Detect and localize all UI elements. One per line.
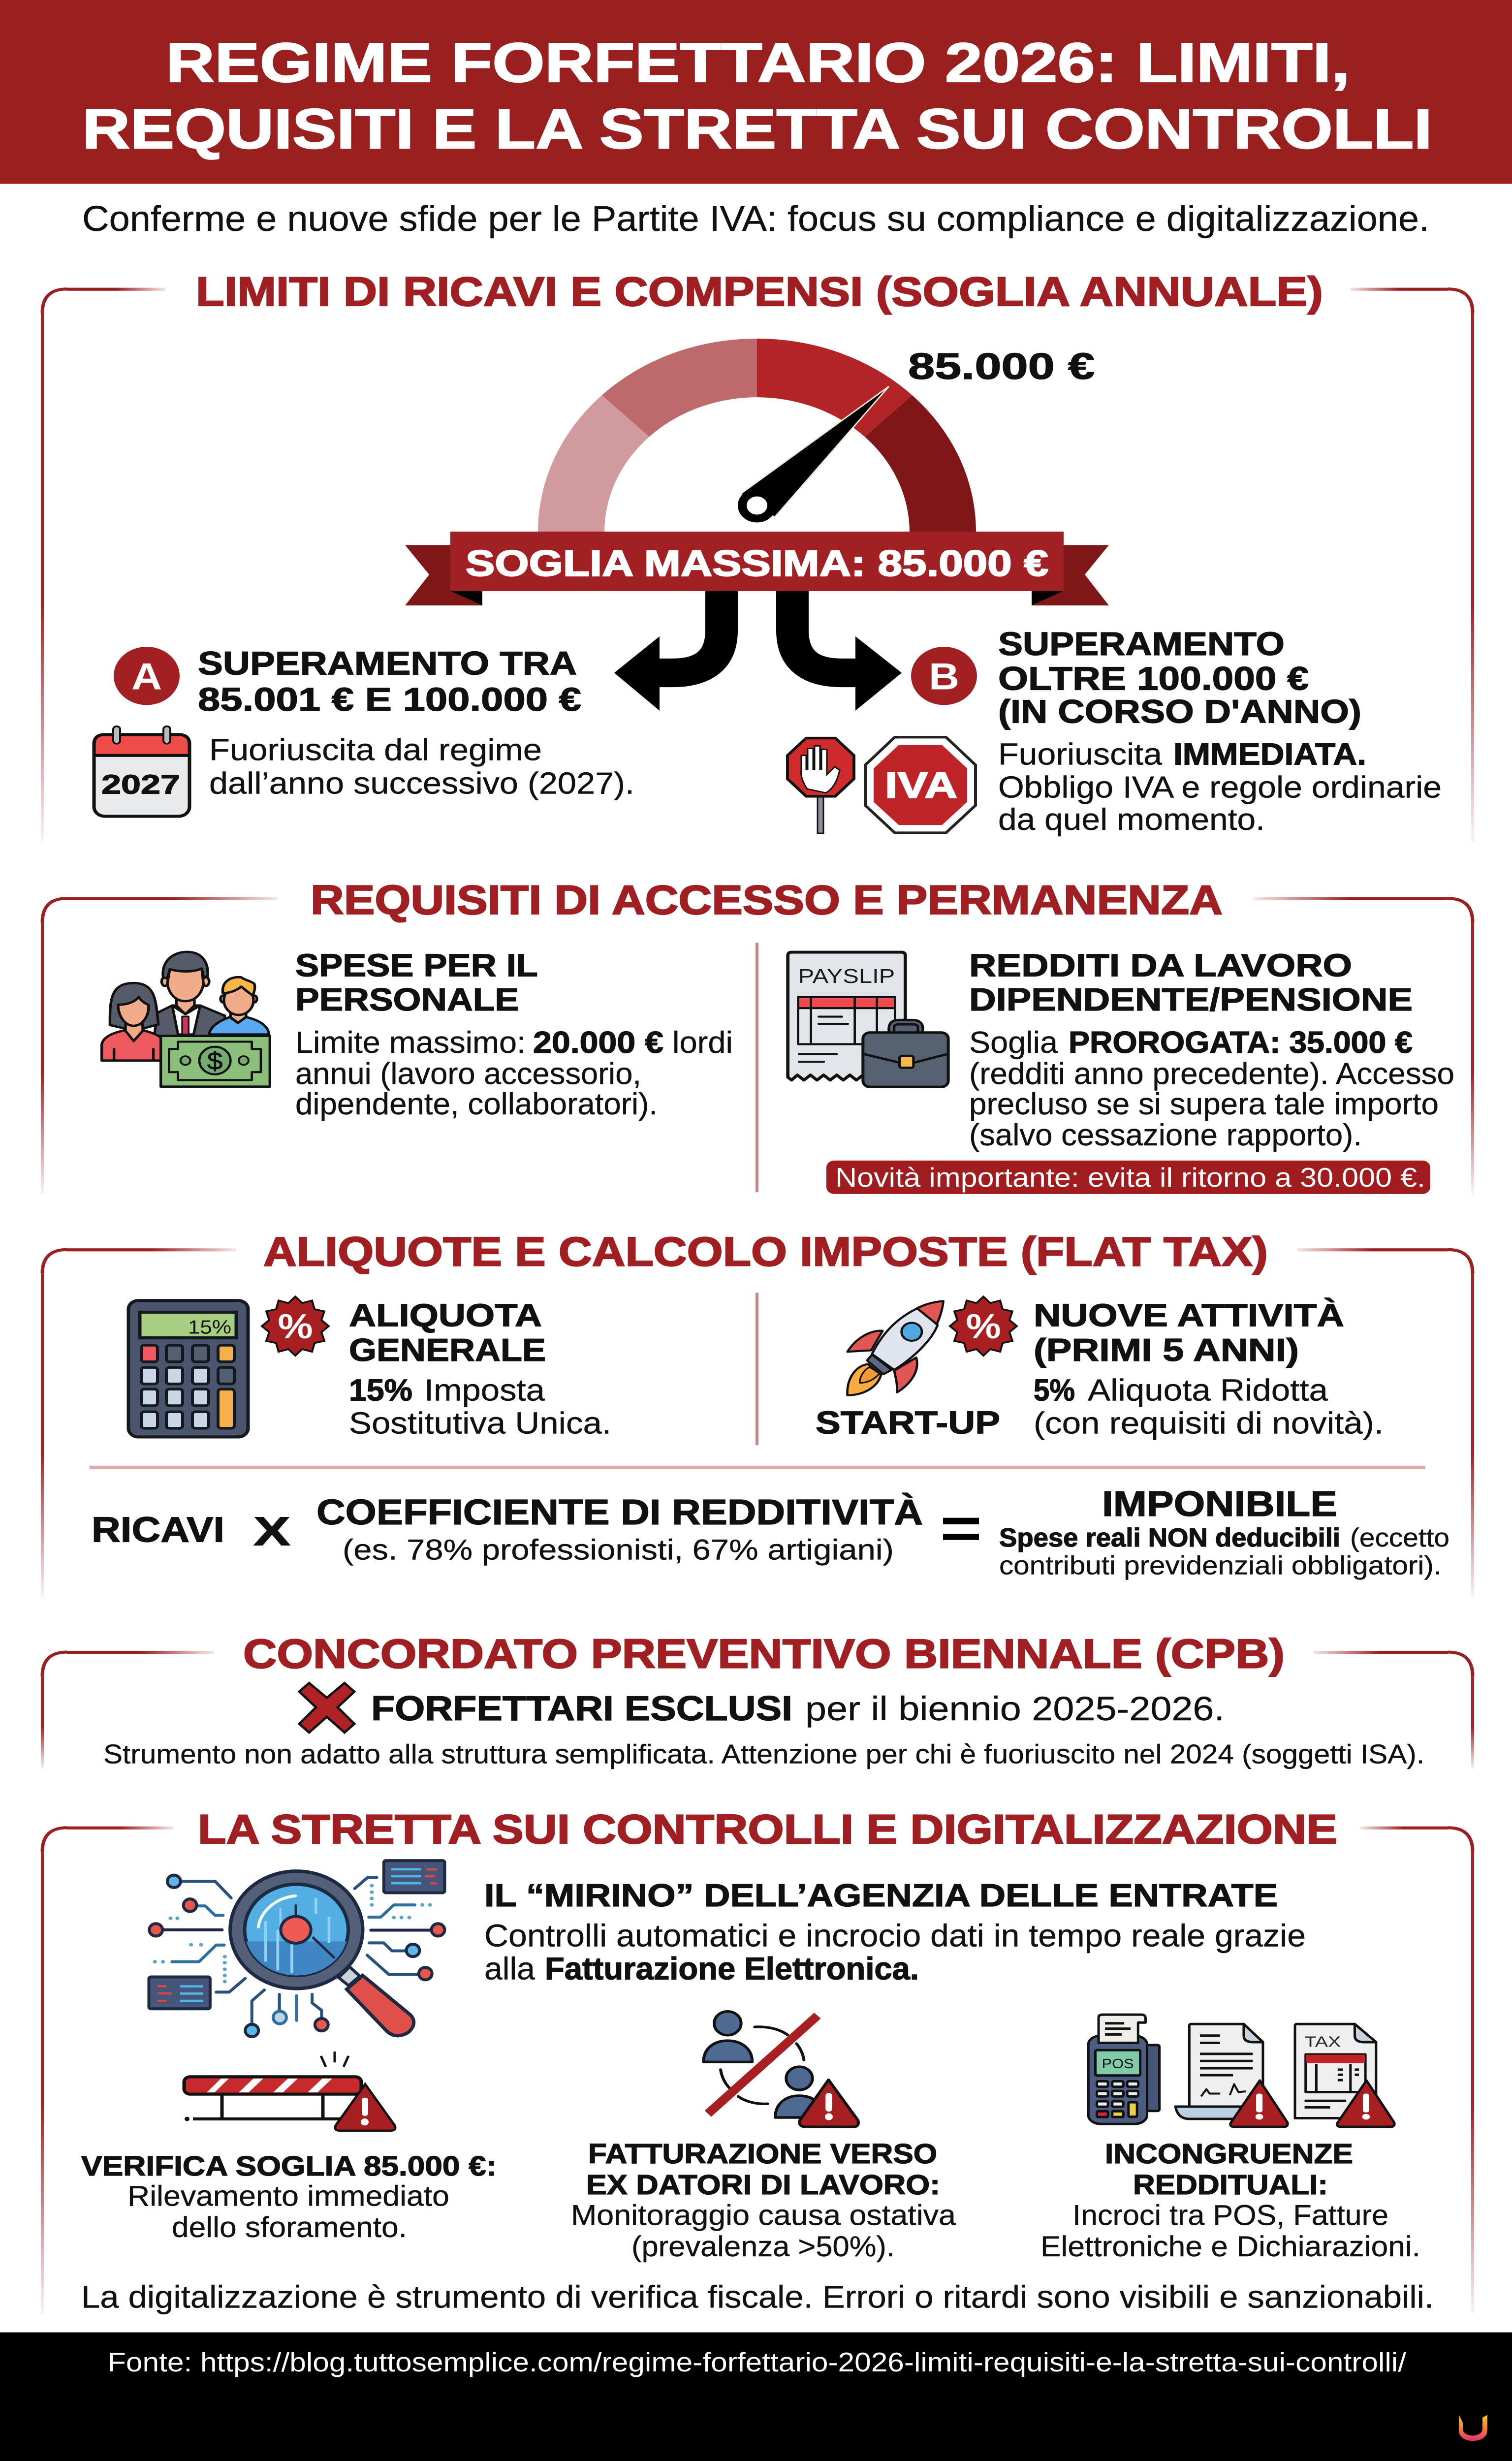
item: incongruenze: Elettroniche e Dichiarazioni.	[1040, 2231, 1420, 2263]
title: REQUISITI E LA STRETTA SUI CONTROLLI	[82, 97, 1432, 160]
option A	[94, 645, 634, 816]
text: A	[209, 732, 634, 800]
formula: IMPONIBILE	[1102, 1484, 1337, 1524]
icon: payslip and briefcase: PAYSLIP	[798, 965, 895, 988]
heading: redditi: REDDITI DA LAVORO	[969, 947, 1352, 983]
icon: A badge: A	[131, 656, 162, 697]
text: nuove attività: (con requisiti di novità).	[1034, 1406, 1384, 1440]
icon: B badge: B	[929, 656, 959, 697]
text: mirino: Fatturazione Elettronica.	[545, 1952, 919, 1987]
header banner	[0, 0, 1512, 184]
heading: nuove attività: (PRIMI 5 ANNI)	[1034, 1332, 1299, 1368]
formula: (es. 78% professionisti, 67% artigiani)	[343, 1534, 894, 1566]
icon: POS and documents: TAX	[1305, 2034, 1341, 2051]
heading: B: (IN CORSO D'ANNO)	[998, 694, 1361, 730]
text: redditi	[969, 1025, 1454, 1152]
heading: controlli: LA STRETTA SUI CONTROLLI E DIGITALIZZAZIONE	[198, 1806, 1337, 1852]
heading: nuove attività: NUOVE ATTIVITÀ	[1034, 1297, 1344, 1333]
text: spese: Limite massimo:	[295, 1025, 526, 1059]
item: verifica soglia	[81, 2150, 497, 2243]
item: incongruenze: Incroci tra POS, Fatture	[1072, 2200, 1388, 2232]
icon: payslip and briefcase	[788, 952, 948, 1087]
label: start-up: START-UP	[816, 1404, 1000, 1440]
text: mirino	[484, 1919, 1306, 1987]
icon: IVA stop sign: IVA	[885, 764, 957, 805]
gauge value: 85.000 €	[908, 346, 1095, 387]
panel: controlli	[41, 1806, 1474, 2314]
formula: X	[253, 1508, 290, 1554]
heading: redditi	[969, 947, 1413, 1017]
heading: A: 85.001 € E 100.000 €	[198, 681, 581, 718]
item: fatturazione: Monitoraggio causa ostativa	[571, 2200, 956, 2232]
panel: requisiti	[41, 877, 1474, 1195]
text: esclusi	[371, 1689, 1225, 1728]
heading: spese: SPESE PER IL	[295, 947, 538, 983]
icon: ex employer	[703, 2012, 858, 2127]
icon: people and money	[102, 952, 270, 1087]
icon: percent badge 2	[950, 1296, 1017, 1356]
text: spese: 20.000 €	[533, 1025, 663, 1059]
text: redditi: PROROGATA: 35.000 €	[1069, 1025, 1413, 1059]
text: mirino: Controlli automatici e incrocio dati in tempo reale grazie	[484, 1919, 1306, 1953]
text: aliquota generale: Sostitutiva Unica.	[349, 1406, 611, 1440]
formula: Spese reali NON deducibili	[999, 1523, 1340, 1552]
item: fatturazione: (prevalenza >50%).	[631, 2231, 895, 2263]
option B	[788, 626, 1442, 836]
text: B: Fuoriuscita	[998, 737, 1162, 771]
icon: calculator: 15%	[188, 1316, 231, 1338]
subtitle: Conferme e nuove sfide per le Partite IVA: focus su compliance e digitalizzazione.	[82, 199, 1429, 239]
panel: concordato	[41, 1631, 1474, 1769]
text: spese: dipendente, collaboratori).	[295, 1087, 658, 1121]
ribbon	[405, 532, 1109, 605]
item: fatturazione: FATTURAZIONE VERSO	[588, 2138, 937, 2169]
icon: rocket	[848, 1301, 944, 1395]
heading: mirino: IL “MIRINO” DELL’AGENZIA DELLE ENTRATE	[484, 1877, 1278, 1913]
formula: contributi previdenziali obbligatori).	[999, 1551, 1442, 1580]
formula: COEFFICIENTE DI REDDITIVITÀ	[316, 1492, 923, 1532]
text: B: Obbligo IVA e regole ordinarie	[998, 770, 1442, 804]
callout: novità: Novità importante: evita il ritorno a 30.000 €.	[835, 1163, 1425, 1193]
text: redditi: (salvo cessazione rapporto).	[969, 1118, 1362, 1152]
heading: B: SUPERAMENTO	[998, 626, 1285, 663]
heading: aliquota generale: GENERALE	[349, 1332, 546, 1368]
icon: percent badge 2: %	[966, 1307, 1001, 1346]
heading: spese	[295, 947, 538, 1017]
text: nuove attività: 5%	[1034, 1373, 1075, 1407]
text: spese: lordi	[672, 1025, 733, 1059]
heading: spese: PERSONALE	[295, 981, 519, 1017]
heading: concordato: CONCORDATO PREVENTIVO BIENNALE (CPB)	[243, 1631, 1285, 1676]
text: redditi: Soglia	[969, 1025, 1058, 1059]
icon: percent badge: %	[278, 1307, 313, 1346]
text: nuove attività	[1034, 1373, 1384, 1440]
heading: A: SUPERAMENTO TRA	[198, 645, 577, 682]
icon: red x	[299, 1683, 354, 1733]
icon: stop hand	[788, 738, 854, 833]
source: Fonte: https://blog.tuttosemplice.com/regime-forfettario-2026-limiti-requisiti-e-la-stretta-sui-controlli/	[108, 2347, 1407, 2377]
text: B: da quel momento.	[998, 802, 1265, 836]
arrows	[614, 587, 902, 711]
heading: aliquote: ALIQUOTE E CALCOLO IMPOSTE (FLAT TAX)	[263, 1229, 1268, 1274]
icon: calendar 2027	[94, 726, 189, 816]
heading: A	[198, 645, 581, 718]
text: redditi: precluso se si supera tale importo	[969, 1087, 1439, 1121]
icon: A badge	[114, 647, 180, 705]
text: aliquota generale	[349, 1373, 611, 1440]
text: conclusione: La digitalizzazione è strumento di verifica fiscale. Errori o ritardi sono visibili e sanzionabili.	[81, 2280, 1434, 2314]
item: verifica soglia: VERIFICA SOGLIA 85.000 €:	[81, 2150, 497, 2181]
item: verifica soglia: Rilevamento immediato	[127, 2180, 449, 2212]
item: verifica soglia: dello sforamento.	[172, 2212, 407, 2243]
icon: percent badge	[262, 1296, 329, 1356]
text: B	[998, 737, 1442, 836]
formula: (eccetto	[1350, 1523, 1449, 1552]
item: fatturazione: EX DATORI DI LAVORO:	[586, 2169, 940, 2200]
footer	[0, 2333, 1512, 2461]
heading: requisiti: REQUISITI DI ACCESSO E PERMANENZA	[311, 877, 1223, 923]
gauge	[538, 339, 976, 532]
icon: barrier	[184, 2051, 395, 2131]
heading: B: OLTRE 100.000 €	[998, 661, 1309, 697]
icon: calculator	[128, 1300, 248, 1437]
text: spese	[295, 1025, 733, 1121]
icon: people and money: $	[207, 1047, 222, 1075]
icon: logo	[1459, 2415, 1487, 2441]
text: A: Fuoriuscita dal regime	[209, 732, 542, 767]
icon: POS and documents	[1088, 2015, 1394, 2127]
icon: calendar 2027: 2027	[101, 770, 180, 800]
panel: limiti di ricavi	[41, 268, 1474, 842]
heading: B	[998, 626, 1361, 730]
text: esclusi: FORFETTARI ESCLUSI	[371, 1689, 792, 1728]
text: B: IMMEDIATA.	[1173, 737, 1366, 771]
title	[82, 32, 1432, 160]
icon: magnifier circuit	[149, 1861, 444, 2037]
text: A: dall’anno successivo (2027).	[209, 766, 634, 800]
item: incongruenze	[1040, 2138, 1420, 2263]
text: redditi: (redditi anno precedente). Accesso	[969, 1056, 1454, 1091]
formula: RICAVI	[92, 1510, 224, 1549]
text: spese: annui (lavoro accessorio,	[295, 1056, 641, 1091]
heading: aliquota generale: ALIQUOTA	[349, 1297, 542, 1333]
icon: IVA stop sign	[865, 737, 976, 833]
formula	[92, 1484, 1449, 1580]
heading: limiti: LIMITI DI RICAVI E COMPENSI (SOGLIA ANNUALE)	[196, 268, 1323, 315]
text: esclusi: per il biennio 2025-2026.	[805, 1690, 1225, 1728]
item: incongruenze: REDDITUALI:	[1133, 2169, 1328, 2200]
icon: B badge	[911, 647, 977, 705]
item: incongruenze: INCONGRUENZE	[1105, 2138, 1353, 2169]
heading: redditi: DIPENDENTE/PENSIONE	[969, 981, 1413, 1017]
text: aliquota generale: Imposta	[424, 1373, 545, 1407]
icon: POS and documents: POS	[1102, 2056, 1134, 2071]
ribbon: SOGLIA MASSIMA: 85.000 €	[466, 543, 1048, 584]
panel: aliquote	[41, 1229, 1474, 1598]
text: aliquota generale: 15%	[349, 1373, 412, 1407]
text: mirino: alla	[484, 1952, 535, 1987]
item: fatturazione	[571, 2138, 956, 2263]
text: nuove attività: Aliquota Ridotta	[1088, 1373, 1328, 1407]
heading: aliquota generale	[349, 1297, 546, 1368]
text: strumento: Strumento non adatto alla struttura semplificata. Attenzione per chi è fuoriuscito nel 2024 (soggetti ISA).	[103, 1739, 1424, 1769]
heading: nuove attività	[1034, 1297, 1344, 1368]
title: REGIME FORFETTARIO 2026: LIMITI,	[166, 32, 1350, 94]
